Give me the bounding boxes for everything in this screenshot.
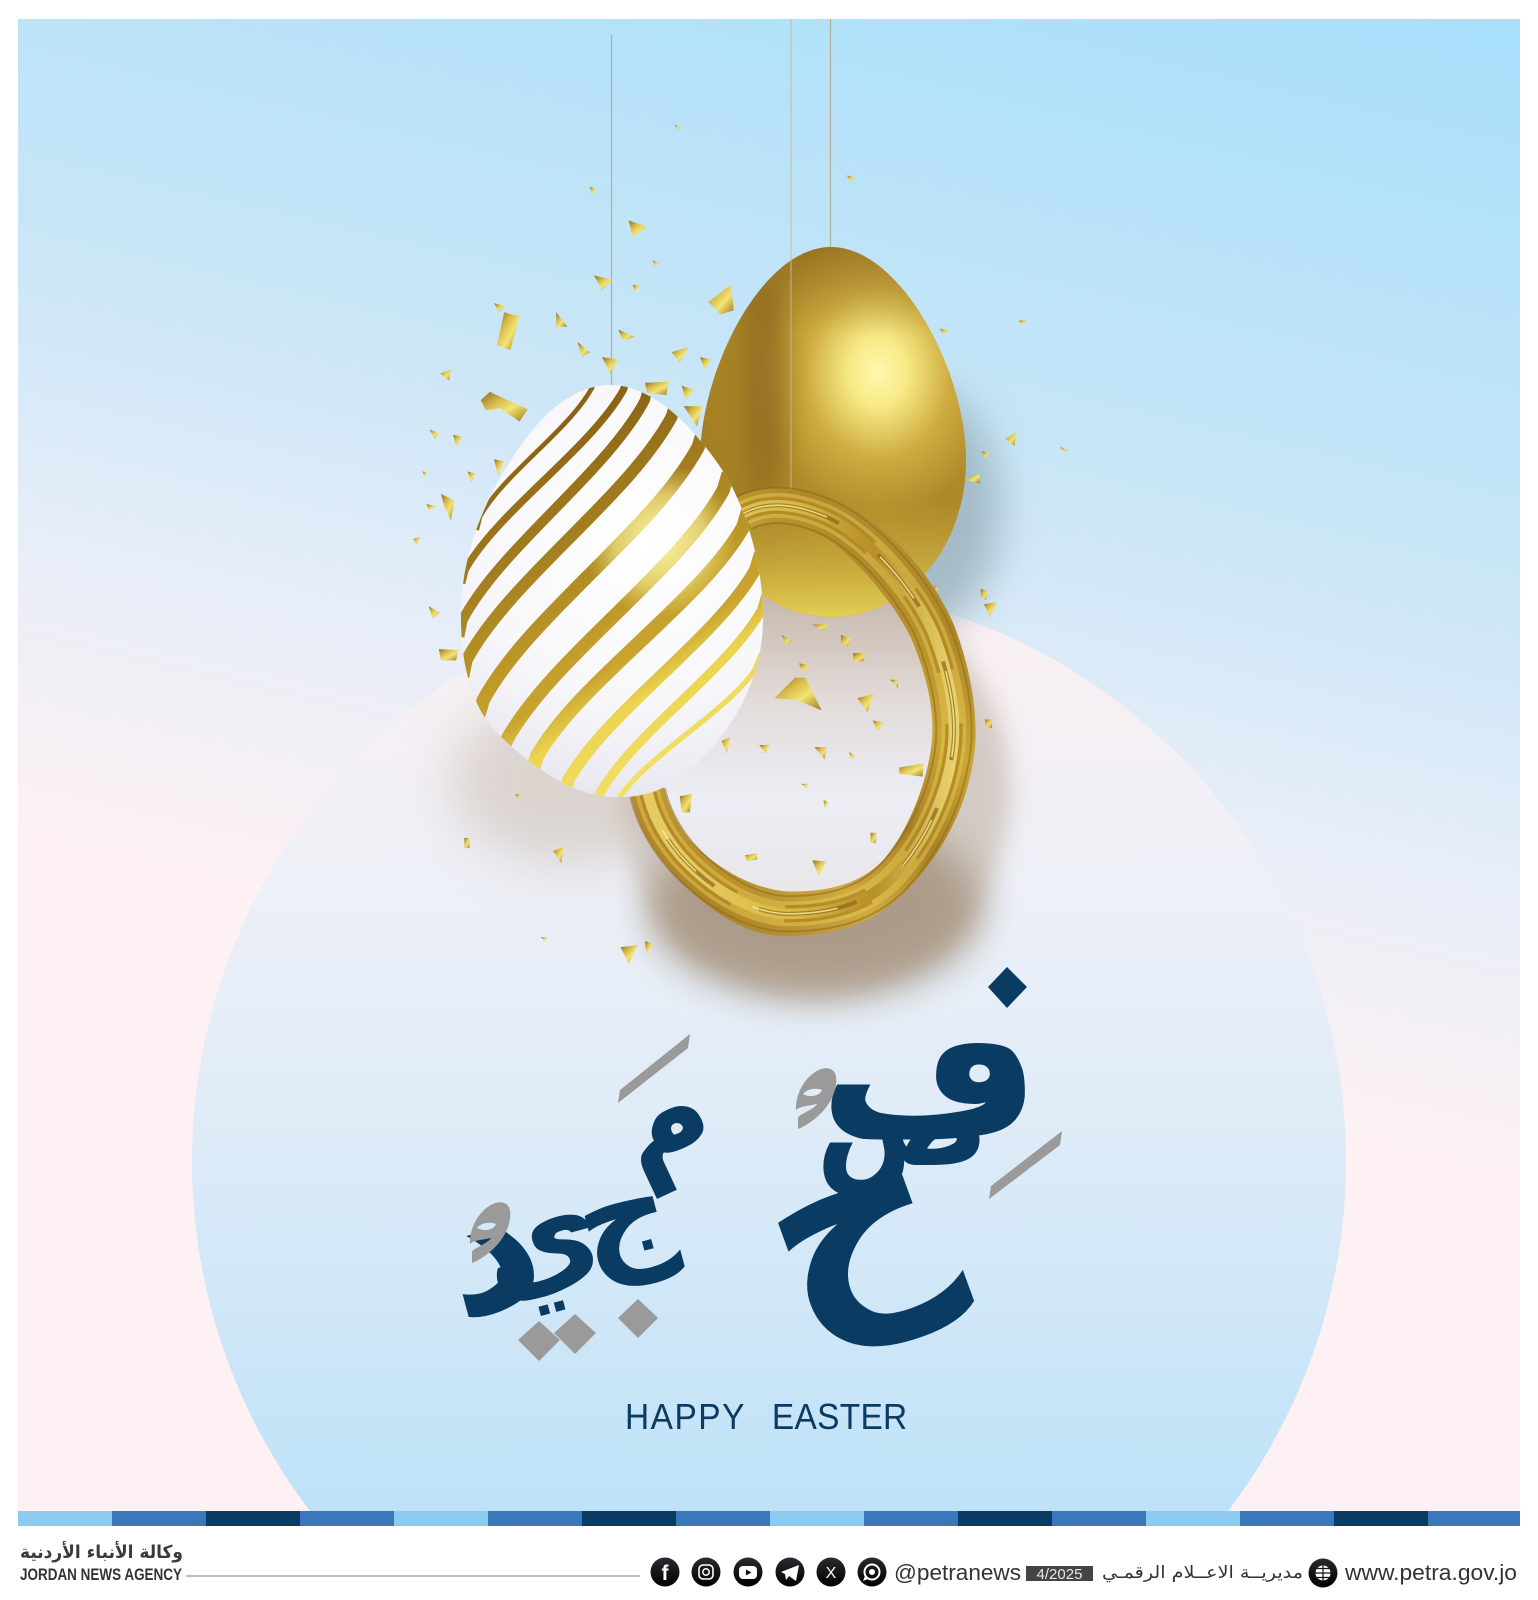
string over golden egg: [790, 19, 792, 500]
icon: X: [816, 1558, 846, 1586]
footer: date tag: [1026, 1566, 1093, 1583]
large pale circle: [192, 584, 1346, 1511]
dot of fa: [966, 967, 1027, 1033]
footer: department name: مديريــة الاعــلام الرقمـي: [1102, 1563, 1303, 1583]
word: فصح: ف: [819, 959, 1040, 1180]
shadow: ring and eggs: [450, 385, 1010, 995]
confetti: [413, 125, 1069, 963]
icon: whatsapp: [858, 1558, 886, 1586]
heading: HAPPY EASTER: EASTER: [772, 1398, 908, 1437]
word: فصح: ح: [716, 1046, 980, 1376]
word: فصح: ص: [815, 1044, 990, 1197]
footer: agency logo text: [20, 1541, 183, 1584]
icon: instagram: [692, 1558, 720, 1586]
word: مجيد: ي: [462, 1148, 616, 1327]
hanging strings: [612, 19, 830, 390]
striped colour bar: [18, 1511, 1520, 1526]
icon: telegram: [776, 1558, 804, 1586]
word: مجيد: م: [588, 1032, 733, 1203]
illustration: hanging eggs and ring: [413, 19, 1069, 995]
icon: facebook: [650, 1558, 680, 1586]
ring hole fill: [663, 519, 932, 892]
calligraphy: Arabic greeting: [412, 959, 1062, 1376]
icon: globe: [1308, 1558, 1338, 1588]
word: مجيد: د: [412, 1125, 563, 1363]
icon: white striped egg: [459, 377, 767, 813]
icon: twisted gold ring: [632, 490, 976, 936]
English agency name: JORDAN NEWS AGENCY: [20, 1565, 183, 1584]
Arabic agency name: وكالة الأنباء الأردنية: [20, 1541, 183, 1563]
icon: youtube: [734, 1558, 762, 1586]
icon: golden egg: [690, 247, 980, 620]
footer: handle: @petranews: [894, 1560, 1021, 1585]
word: مجيد: ج: [557, 1127, 687, 1299]
footer: date tag: 4/2025: [1037, 1566, 1082, 1583]
icon: facebook: f: [662, 1562, 670, 1585]
social icons: [650, 1558, 886, 1586]
icon: X: X: [826, 1565, 837, 1582]
footer rule: [186, 1575, 640, 1577]
heading: HAPPY EASTER: HAPPY: [625, 1398, 746, 1437]
footer: website: www.petra.gov.jo: [1344, 1560, 1517, 1585]
diacritic marks: [470, 1034, 1062, 1361]
